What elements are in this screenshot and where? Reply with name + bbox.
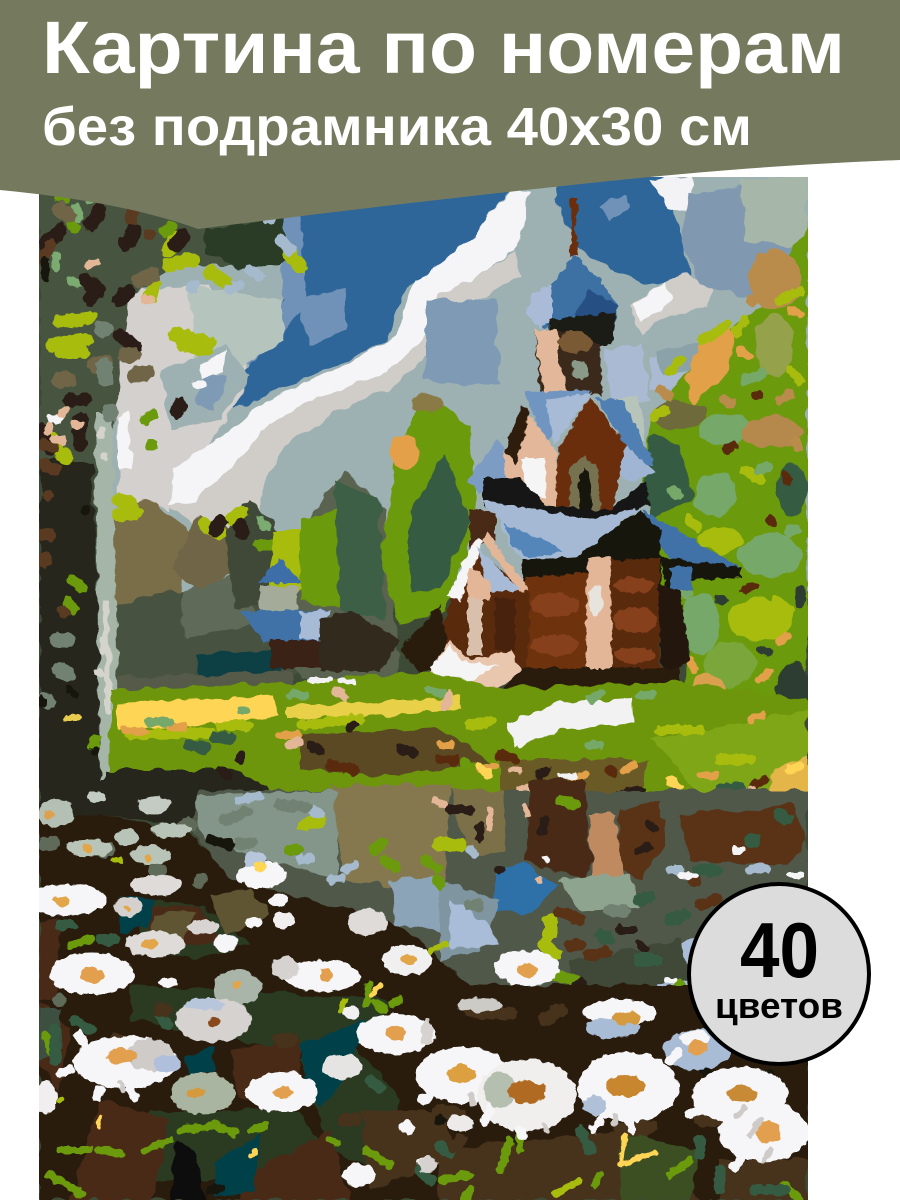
left gable wall — [443, 552, 531, 669]
peach column — [586, 555, 612, 670]
left tree foliage blotches — [42, 192, 300, 781]
left foreground trees — [39, 177, 300, 790]
arched window — [570, 455, 600, 510]
small distant chapel — [240, 558, 400, 672]
roof wings — [467, 439, 506, 494]
right dark wall — [658, 585, 690, 680]
upper walls — [505, 405, 560, 510]
drum — [535, 330, 602, 395]
daisy petals — [60, 1035, 770, 1168]
sky and clouds — [110, 170, 820, 590]
badge label: цветов — [715, 985, 843, 1026]
right lower roof — [643, 510, 740, 567]
daisies — [26, 791, 809, 1186]
meadow foreground — [39, 780, 808, 1200]
church — [400, 198, 742, 692]
header banner — [0, 0, 900, 229]
upper roof left — [525, 390, 590, 445]
dome base — [549, 312, 616, 352]
right trees — [640, 220, 815, 720]
title: Картина по номерам — [42, 6, 845, 89]
background forest right of chapel — [260, 393, 478, 680]
pond reflection — [192, 777, 808, 988]
eave band — [483, 478, 650, 520]
onion dome — [530, 255, 618, 328]
meadow band blotches — [125, 680, 800, 795]
church base — [428, 640, 522, 690]
pond blotches — [225, 763, 800, 1011]
spire — [570, 198, 578, 256]
right tree foliage blotches — [650, 292, 800, 700]
main roof — [480, 500, 640, 560]
main wall — [525, 572, 587, 668]
painting: church by the pond — [26, 170, 820, 1200]
badge: 40 colours — [689, 884, 869, 1064]
upper roof right — [597, 398, 655, 465]
black eave — [660, 557, 742, 590]
meadow grass band — [105, 672, 808, 795]
meadow blotches — [45, 825, 800, 1200]
subtitle: без подрамника 40х30 см — [42, 97, 752, 157]
brown behind main roof — [470, 510, 495, 550]
badge number: 40 — [740, 906, 819, 994]
wall top shadow — [523, 510, 662, 590]
